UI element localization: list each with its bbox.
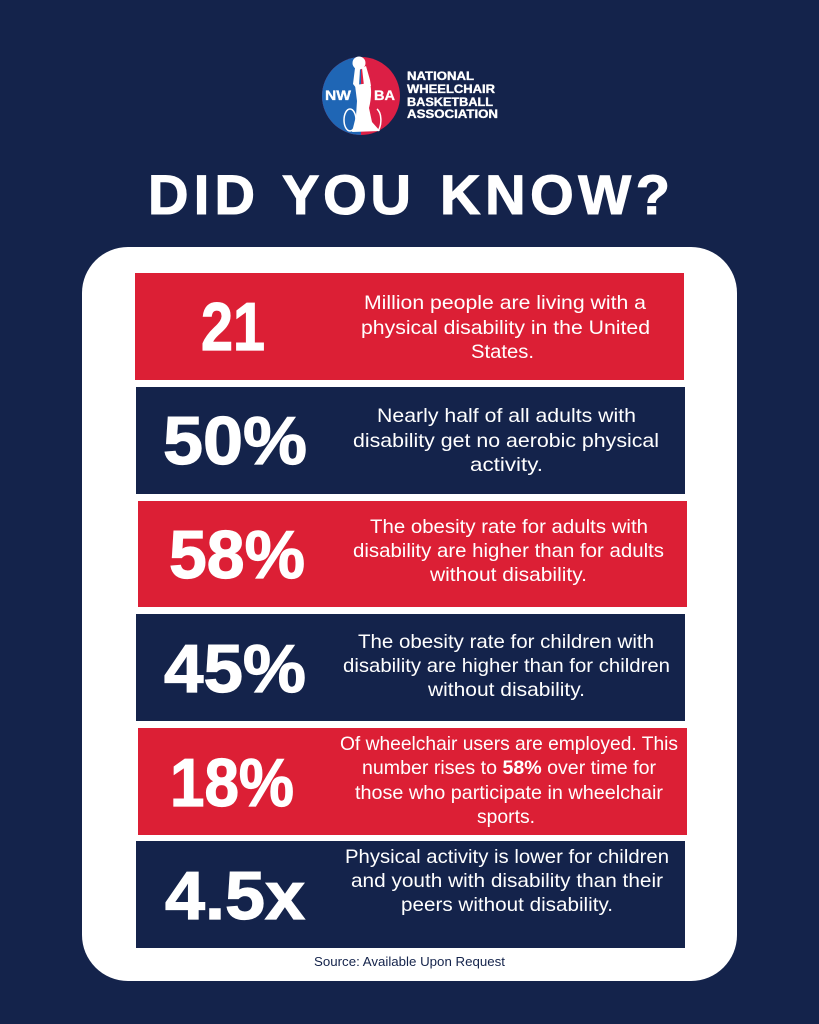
- stat description: 58%: The obesity rate for adults with: [370, 516, 648, 538]
- panel: 18% stat: [138, 728, 687, 835]
- logo wordmark: NATIONAL: [407, 69, 474, 83]
- stat description: 4.5x: [345, 846, 669, 916]
- stat description: 45%: [343, 631, 670, 701]
- logo wordmark: [407, 69, 498, 121]
- stat number: 21: 21: [201, 289, 265, 365]
- stat number: 18%: 18%: [170, 745, 294, 821]
- icon: basketball wheelchair emblem: [322, 56, 400, 135]
- stat description: 50%: [353, 405, 659, 476]
- stat description: 4.5x: peers without disability.: [401, 894, 613, 916]
- stat description: 18%: those who participate in wheelchair: [355, 782, 664, 804]
- title: KNOW?: [440, 163, 670, 226]
- logo: National Wheelchair Basketball Association: [322, 56, 498, 135]
- stat description: 18%: sports.: [477, 806, 535, 828]
- stat description: 18%: [340, 733, 678, 828]
- panel: white statistics card: [82, 247, 737, 981]
- panel: 50% stat: [136, 387, 685, 494]
- stat number: 58%: 58%: [169, 517, 305, 593]
- stat description: 4.5x: and youth with disability than their: [351, 870, 664, 892]
- stat description: 18%: number rises to 58% over time for: [362, 757, 656, 779]
- stat description: 21 million: [361, 292, 650, 363]
- panel: 4.5x stat: [136, 841, 685, 948]
- icon: basketball wheelchair emblem: BA: [374, 87, 395, 103]
- icon: basketball wheelchair emblem: NW: [325, 87, 352, 103]
- logo wordmark: WHEELCHAIR: [407, 82, 495, 96]
- source note: Source: Available Upon Request: [314, 954, 505, 969]
- stat number: 45%: 45%: [164, 631, 306, 707]
- stat description: 58%: [353, 516, 664, 586]
- logo wordmark: BASKETBALL: [407, 95, 493, 109]
- stat description: 50%: Nearly half of all adults with: [377, 405, 636, 427]
- stat number: 4.5x: 4.5x: [165, 858, 305, 934]
- stat description: 21 million: States.: [471, 341, 534, 363]
- title: YOU: [282, 163, 411, 226]
- logo wordmark: ASSOCIATION: [407, 107, 498, 121]
- stat description: 21 million: physical disability in the United: [361, 317, 650, 339]
- stat description: 21 million: Million people are living with a: [364, 292, 646, 314]
- title: DID: [148, 163, 255, 226]
- stat description: 50%: activity.: [470, 454, 543, 476]
- title: [148, 163, 670, 226]
- stat description: 45%: disability are higher than for children: [343, 655, 670, 677]
- stat description: 4.5x: Physical activity is lower for children: [345, 846, 669, 868]
- stat description: 58%: without disability.: [429, 564, 587, 586]
- panel: 21 million stat: [135, 273, 684, 380]
- panel: 45% stat: [136, 614, 685, 721]
- stat description: 45%: without disability.: [427, 679, 585, 701]
- stat number: 50%: 50%: [163, 403, 307, 479]
- stat description: 45%: The obesity rate for children with: [358, 631, 654, 653]
- stat description: 18%: Of wheelchair users are employed. This: [340, 733, 678, 755]
- panel: 58% stat: [138, 501, 687, 607]
- stat description: 58%: disability are higher than for adults: [353, 540, 664, 562]
- stat description: 50%: disability get no aerobic physical: [353, 430, 659, 452]
